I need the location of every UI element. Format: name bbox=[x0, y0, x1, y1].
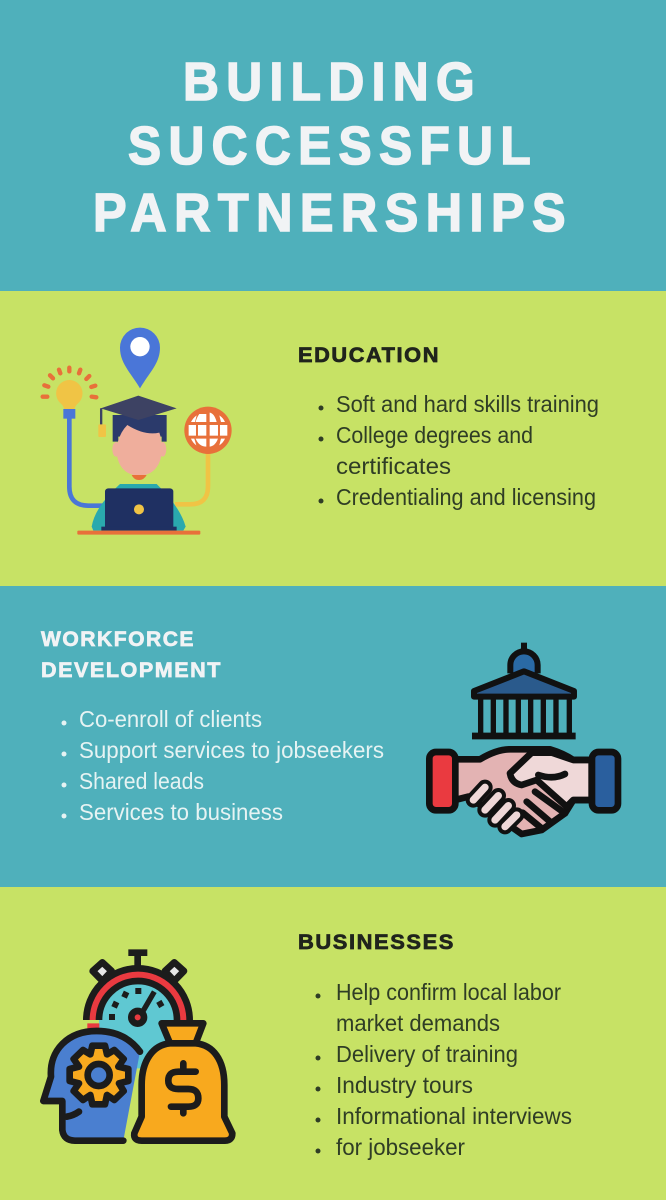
list: businesses: Help confirm local labor bbox=[336, 979, 561, 1005]
icon: stopwatch, head with gear and money bag bbox=[43, 953, 232, 1141]
panel: education bbox=[0, 291, 666, 586]
heading: workforce development bbox=[41, 628, 222, 682]
list: businesses: for jobseeker bbox=[336, 1134, 465, 1160]
panel: workforce development bbox=[0, 586, 666, 887]
heading: workforce development: WORKFORCE bbox=[41, 628, 195, 651]
list: workforce development: Co-enroll of clients bbox=[79, 706, 262, 732]
icon: building bbox=[472, 643, 576, 736]
list: education: Credentialing and licensing bbox=[336, 484, 596, 510]
list: workforce development: Services to business bbox=[79, 799, 283, 825]
list: education bbox=[318, 391, 599, 510]
heading: workforce development: DEVELOPMENT bbox=[41, 659, 222, 682]
list: businesses: Informational interviews bbox=[336, 1103, 572, 1129]
list: businesses bbox=[316, 979, 572, 1160]
icon: handshake bbox=[429, 749, 618, 834]
icon: head with gear bbox=[43, 1031, 140, 1141]
list: workforce development: Shared leads bbox=[79, 768, 204, 794]
list: education: College degrees and bbox=[336, 422, 533, 448]
title: BUILDING bbox=[183, 52, 482, 112]
title bbox=[93, 52, 573, 243]
list: businesses: market demands bbox=[336, 1010, 500, 1036]
title: SUCCESSFUL bbox=[128, 116, 538, 176]
icon: government building and handshake bbox=[429, 643, 618, 834]
panel: businesses bbox=[0, 887, 666, 1200]
title: PARTNERSHIPS bbox=[93, 183, 573, 243]
list: education: Soft and hard skills training bbox=[336, 391, 599, 417]
panel: title band bbox=[0, 0, 666, 291]
icon: stopwatch bbox=[86, 953, 190, 1068]
list: workforce development bbox=[62, 706, 384, 825]
list: businesses: Industry tours bbox=[336, 1072, 473, 1098]
list: businesses: Delivery of training bbox=[336, 1041, 518, 1067]
list: education: certificates bbox=[336, 453, 451, 479]
icon: money bag bbox=[134, 1023, 232, 1141]
heading: businesses: BUSINESSES bbox=[298, 931, 455, 954]
icon: graduate with laptop, pin, bulb and globe bbox=[43, 328, 232, 535]
heading: education: EDUCATION bbox=[298, 344, 440, 367]
list: workforce development: Support services to jobseekers bbox=[79, 737, 384, 763]
